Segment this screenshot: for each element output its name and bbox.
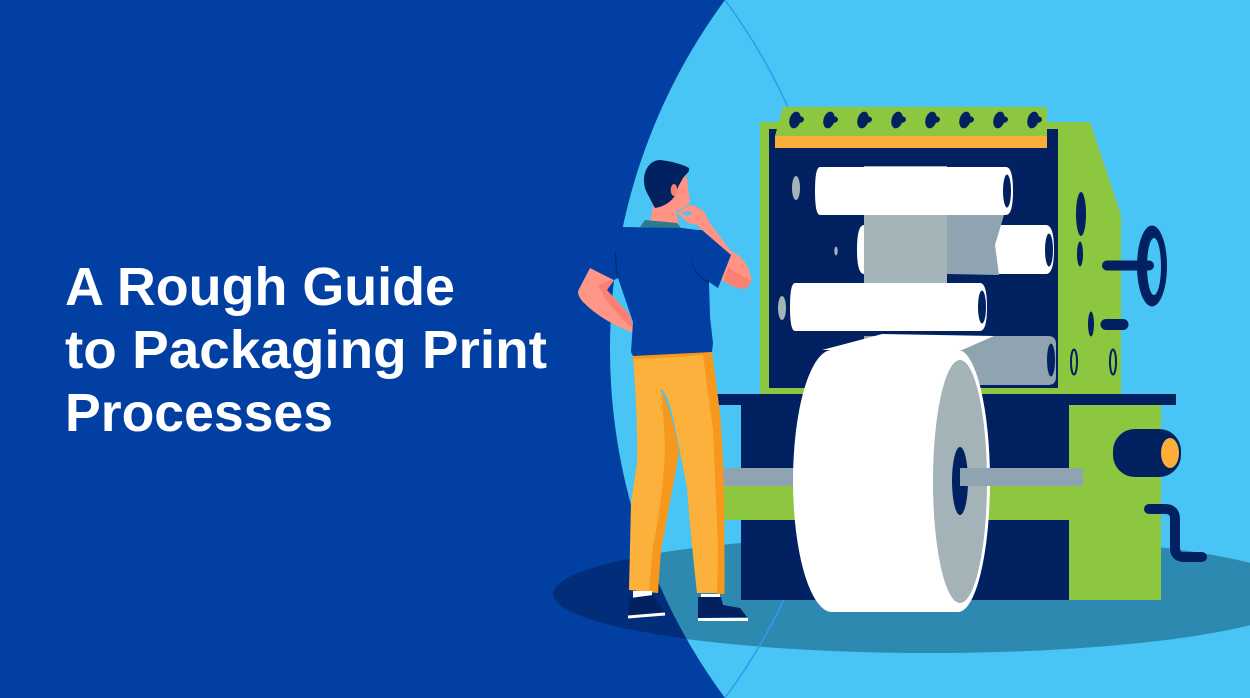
large paper roll xyxy=(793,334,1083,612)
thin arc line xyxy=(725,0,840,698)
forearm shadow xyxy=(724,268,751,289)
back arm xyxy=(578,268,634,333)
neck and face xyxy=(650,172,690,229)
hair xyxy=(644,160,689,208)
person looking at machine xyxy=(578,160,751,620)
roller 3 xyxy=(790,283,987,331)
gap between fingers xyxy=(682,212,692,216)
right shoe xyxy=(698,594,748,620)
ear xyxy=(671,184,677,196)
roller 4 grey xyxy=(864,336,1056,385)
screws xyxy=(787,110,1042,130)
floor shadow ellipse xyxy=(553,535,1250,653)
trousers xyxy=(629,352,725,594)
side controls xyxy=(1071,192,1167,374)
title xyxy=(65,257,547,443)
left shoe xyxy=(628,591,665,617)
title: Processes xyxy=(65,383,333,443)
dark roller chamber xyxy=(769,129,1058,388)
back arm shadow xyxy=(598,279,633,328)
machine upper body xyxy=(760,122,1121,394)
raised forearm and hand xyxy=(677,205,751,289)
shirt xyxy=(590,227,731,357)
motor cylinder xyxy=(1113,429,1181,477)
title: to Packaging Print xyxy=(65,320,547,380)
machine base xyxy=(723,405,1161,600)
printing press machine xyxy=(717,107,1202,612)
table bar xyxy=(717,394,1176,405)
top clamp strip xyxy=(775,107,1047,148)
shirt creases xyxy=(615,252,709,284)
roller 1 xyxy=(815,167,1013,215)
paper web grey xyxy=(864,166,1004,283)
background: dark blue curved panel xyxy=(0,0,725,698)
title: A Rough Guide xyxy=(65,257,455,317)
waistband shade xyxy=(633,352,712,359)
trouser shade right leg xyxy=(703,353,725,594)
collar xyxy=(640,220,682,229)
small chamber pins xyxy=(778,176,838,320)
crank handle xyxy=(1149,509,1202,557)
trouser shade left leg xyxy=(649,390,679,593)
roller 2 xyxy=(857,225,1054,274)
